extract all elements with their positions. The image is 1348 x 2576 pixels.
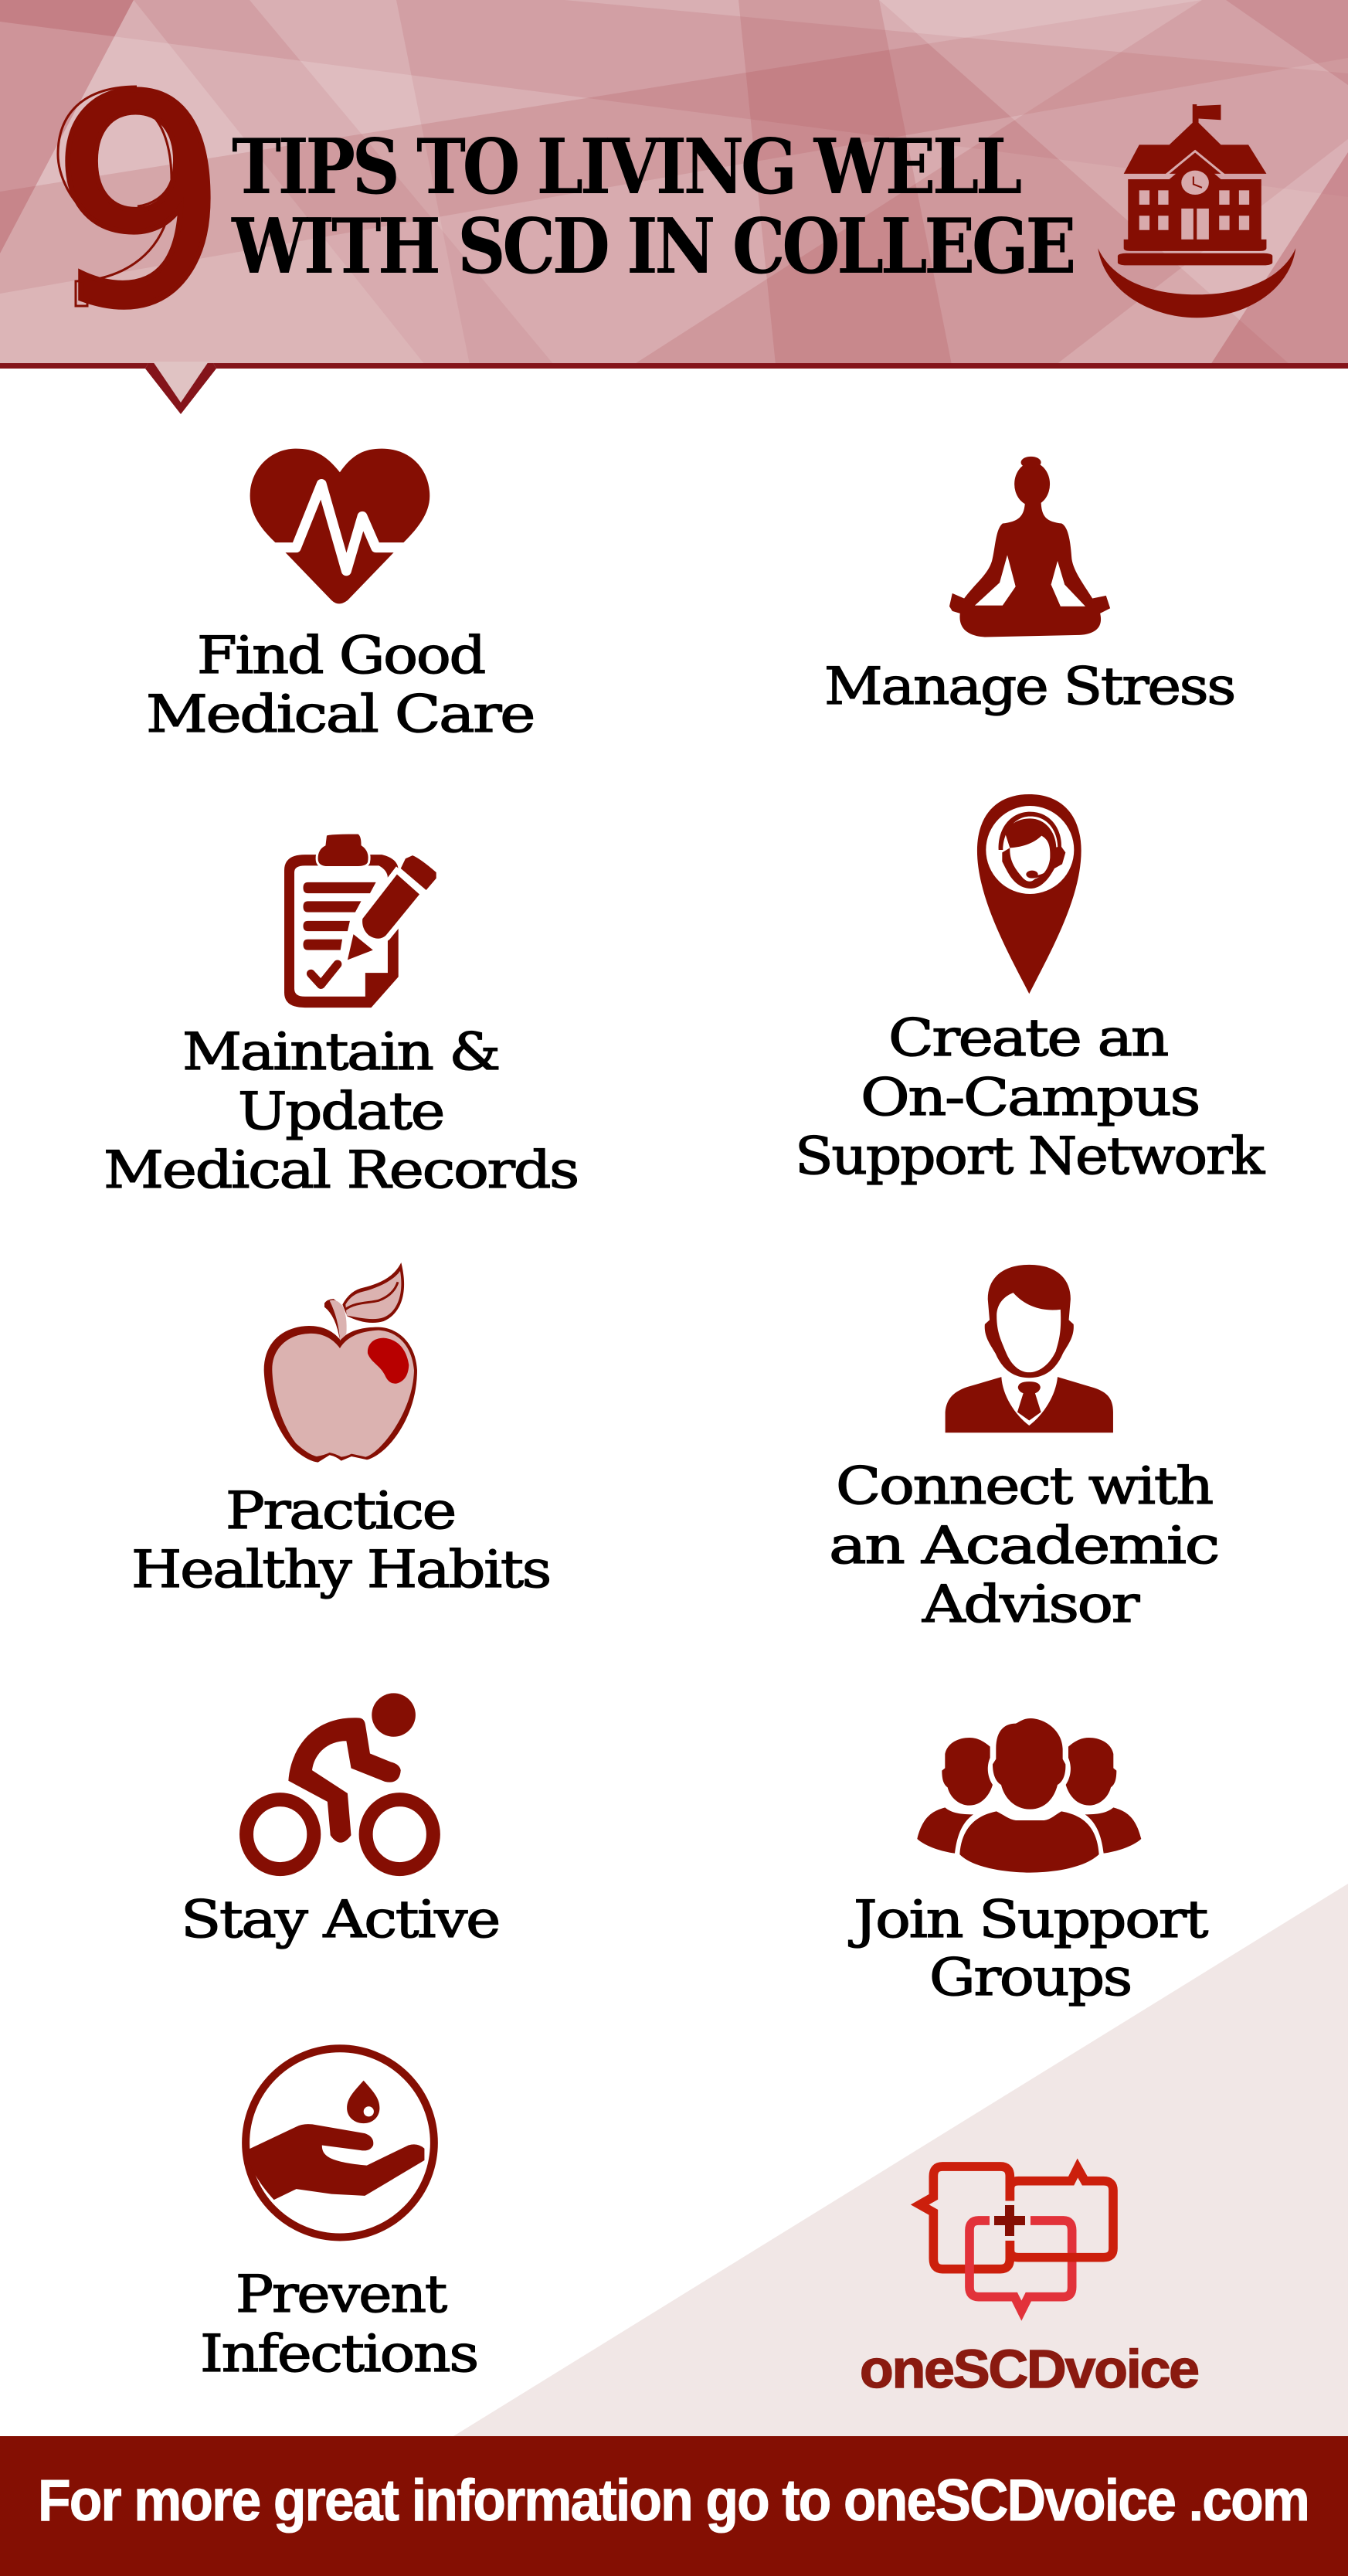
title	[231, 123, 1073, 291]
label: an Academic	[829, 1516, 1218, 1575]
title: TIPS TO LIVING WELL	[232, 123, 1021, 212]
label	[848, 1890, 1208, 2007]
label: Advisor	[922, 1575, 1140, 1634]
label: Medical Records	[104, 1140, 578, 1200]
logo: oneSCDvoice	[860, 2166, 1198, 2399]
tip: stay active	[181, 1693, 499, 1949]
tip: manage stress	[824, 457, 1234, 716]
logo wordmark: oneSCDvoice	[860, 2339, 1198, 2399]
icon: meditating figure	[949, 457, 1110, 637]
tip: join support groups	[848, 1718, 1208, 2007]
label: Groups	[929, 1948, 1131, 2007]
icon: location pin with headset person	[977, 794, 1081, 994]
label: Create an	[888, 1008, 1168, 1068]
tip: prevent infections	[200, 2048, 477, 2384]
tip: create an on-campus support network	[795, 794, 1265, 1186]
label: Find Good	[197, 626, 485, 685]
label: Practice	[226, 1481, 455, 1541]
light diagonal panel	[453, 1884, 1348, 2436]
label: Healthy Habits	[131, 1540, 550, 1599]
icon: advisor bust	[946, 1265, 1113, 1432]
icon: heart with pulse	[250, 449, 430, 603]
tip: find good medical care	[146, 449, 534, 744]
label	[795, 1008, 1265, 1186]
icon: hand and droplet in circle	[246, 2048, 434, 2237]
label: Infections	[200, 2324, 477, 2384]
big numeral 9: 9	[50, 37, 228, 371]
label: Stay Active	[181, 1890, 499, 1949]
label: Medical Care	[146, 685, 534, 744]
label: Connect with	[836, 1456, 1213, 1516]
icon: apple	[264, 1263, 417, 1463]
icon: speech bubbles with plus	[920, 2166, 1113, 2311]
icon: clipboard and pencil	[284, 833, 436, 1008]
label	[146, 626, 534, 744]
label: Prevent	[236, 2265, 447, 2324]
label	[104, 1022, 578, 1200]
tip: maintain and update medical records	[104, 833, 578, 1200]
label	[829, 1456, 1218, 1634]
header bottom rule with pointer	[0, 362, 1348, 414]
label	[131, 1481, 550, 1599]
icon: cyclist	[246, 1693, 433, 1869]
label: Join Support	[848, 1890, 1208, 1949]
label	[200, 2265, 477, 2384]
label: Support Network	[795, 1127, 1265, 1186]
header banner	[0, 0, 1348, 365]
label: Update	[238, 1082, 443, 1141]
tip: connect with an academic advisor	[829, 1265, 1218, 1634]
icon: college building	[1098, 104, 1295, 318]
label: Manage Stress	[824, 657, 1234, 716]
icon: group of people	[917, 1718, 1141, 1873]
title: WITH SCD IN COLLEGE	[231, 202, 1073, 291]
tip: practice healthy habits	[131, 1263, 550, 1599]
label: On-Campus	[861, 1068, 1199, 1127]
footer bar	[0, 2436, 1348, 2576]
label: Maintain &	[182, 1022, 499, 1082]
